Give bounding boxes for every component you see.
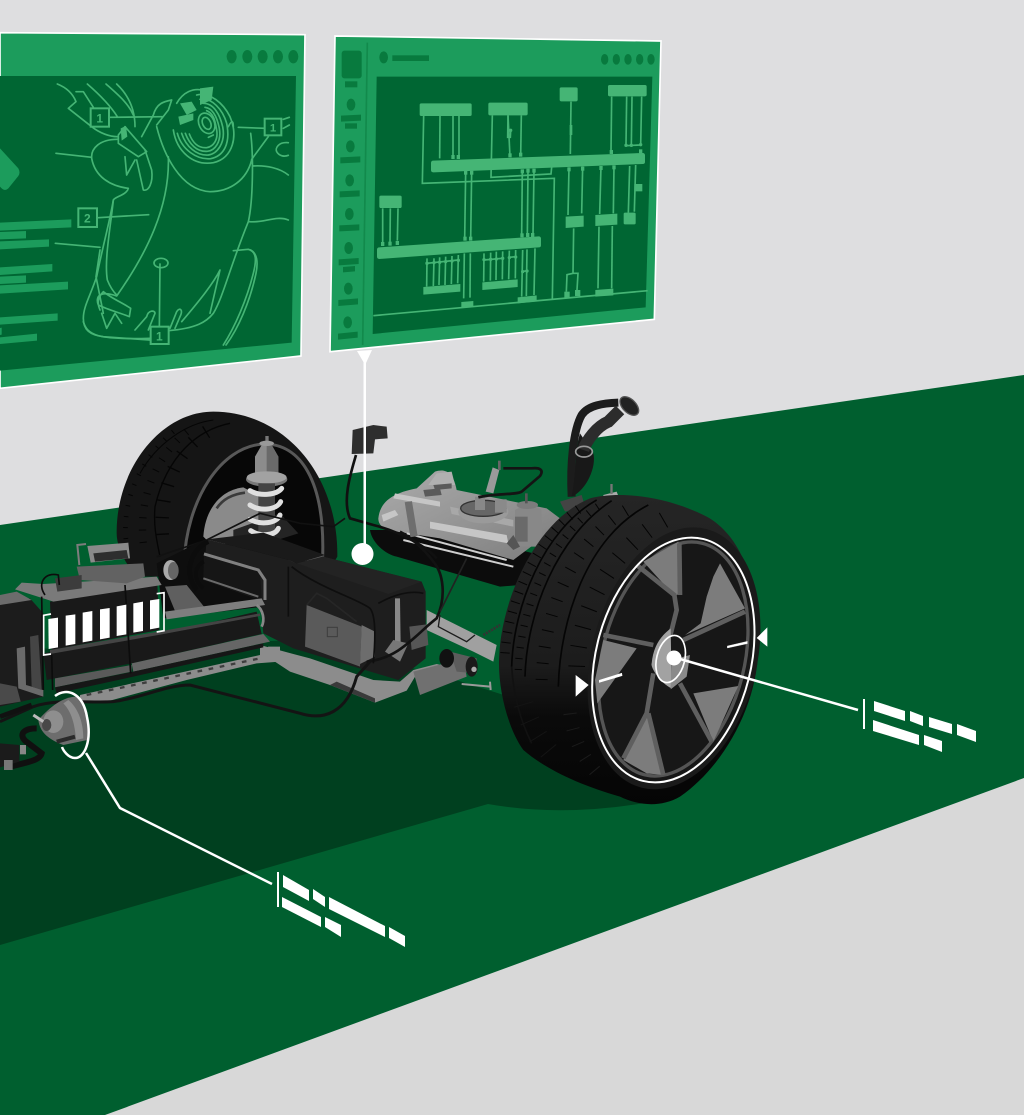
differential hub xyxy=(33,697,88,745)
steering column detail xyxy=(121,87,213,141)
silver chassis rail xyxy=(80,647,280,703)
lower module grey strips xyxy=(55,665,132,687)
rear tire tread xyxy=(125,420,230,557)
board cable xyxy=(288,567,423,663)
floor cable xyxy=(0,662,370,722)
front wheel xyxy=(499,495,786,808)
coolant pipes xyxy=(190,542,265,600)
seat and steering line art xyxy=(55,84,289,345)
shock absorber and arm bracket xyxy=(413,658,467,695)
part callouts xyxy=(78,108,281,344)
coolant hose bottom left xyxy=(0,705,42,770)
pointer from wiring panel to battery xyxy=(352,350,374,565)
lower battery module xyxy=(43,612,262,680)
wheel hub marker dot xyxy=(666,650,682,666)
panel: left repair schematic screen xyxy=(0,33,305,388)
dark base rail xyxy=(55,643,263,693)
right battery block, board and rear suspension xyxy=(157,533,426,680)
brake disc xyxy=(203,487,277,547)
spokes xyxy=(603,543,745,775)
top battery module xyxy=(50,583,159,650)
panel: right wiring diagram screen xyxy=(330,36,661,352)
tank highlights xyxy=(382,472,513,543)
strut and coil spring xyxy=(246,436,287,537)
motor drum xyxy=(163,560,207,615)
rear wheel with strut xyxy=(117,412,345,577)
top frame xyxy=(15,577,162,602)
tank straps xyxy=(403,533,513,567)
hub highlight ring xyxy=(651,632,690,686)
fuel tank and filler neck xyxy=(370,393,642,587)
right callout label xyxy=(863,699,976,752)
upper battery right top face xyxy=(297,557,422,594)
left battery recess xyxy=(203,553,262,600)
text placeholder bars xyxy=(0,148,71,344)
tire sidewall xyxy=(562,509,786,808)
rear wheel well xyxy=(184,444,323,570)
rear tire xyxy=(117,412,337,577)
vehicle shadow on floor xyxy=(0,640,645,945)
strut cable xyxy=(157,513,345,557)
tread blocks xyxy=(505,505,667,780)
part callouts: 2 xyxy=(84,212,91,226)
module cables xyxy=(42,574,131,690)
tank pipe xyxy=(408,461,542,537)
lower tray xyxy=(260,645,448,703)
front tire xyxy=(499,495,759,804)
side connector xyxy=(409,624,428,650)
tie rod xyxy=(440,558,467,612)
filter canister xyxy=(507,493,542,550)
tank underside xyxy=(370,530,547,587)
long cable from board to tank xyxy=(367,532,443,662)
upper grey rail xyxy=(165,598,265,619)
sensor connector and cable xyxy=(347,425,437,558)
dark recess behind the modules xyxy=(157,540,263,618)
battery highlight bars xyxy=(44,593,164,655)
right pillar xyxy=(395,598,401,647)
right bracket xyxy=(157,593,164,632)
module seam strip xyxy=(50,613,260,654)
upper battery block body xyxy=(203,539,426,680)
green floor band xyxy=(0,375,1024,1115)
wiring ground rail xyxy=(373,291,648,316)
pump flange xyxy=(423,483,508,523)
wiring boxes and busbars xyxy=(377,85,647,308)
leader line to left callout xyxy=(86,753,272,884)
left callout label xyxy=(277,872,405,947)
filler neck xyxy=(560,393,642,512)
control board xyxy=(305,605,362,667)
rotation marker right xyxy=(727,627,767,648)
wiring lines xyxy=(383,97,642,299)
upper battery top face xyxy=(207,533,325,563)
hub highlight ellipse xyxy=(55,692,89,758)
tank body xyxy=(378,471,560,560)
spoke faces xyxy=(595,542,745,775)
rim highlight ring xyxy=(568,520,779,800)
rotation marker left xyxy=(576,673,622,697)
left battery block xyxy=(0,598,43,707)
leader line from wheel to right callout xyxy=(673,657,858,710)
part callouts: 1 xyxy=(270,123,276,135)
window control dots xyxy=(227,50,298,63)
rim inner barrel xyxy=(576,526,771,792)
circumferential grooves xyxy=(512,500,648,743)
background: light floor xyxy=(105,778,1024,1115)
rim xyxy=(571,521,776,797)
part callouts: 1 xyxy=(96,112,103,126)
caliper behind the strut xyxy=(233,513,298,547)
right tube loop xyxy=(257,605,263,627)
top bracket cluster xyxy=(55,543,145,592)
battery control module and rear arm xyxy=(260,532,500,703)
rear control arm xyxy=(427,610,497,662)
part callouts: 1 xyxy=(156,329,163,343)
hub xyxy=(651,628,672,688)
left battery pack and hub xyxy=(0,543,370,770)
header and sidebar icons xyxy=(338,51,655,340)
left bracket xyxy=(44,614,51,655)
lower tray shadow xyxy=(330,682,375,703)
